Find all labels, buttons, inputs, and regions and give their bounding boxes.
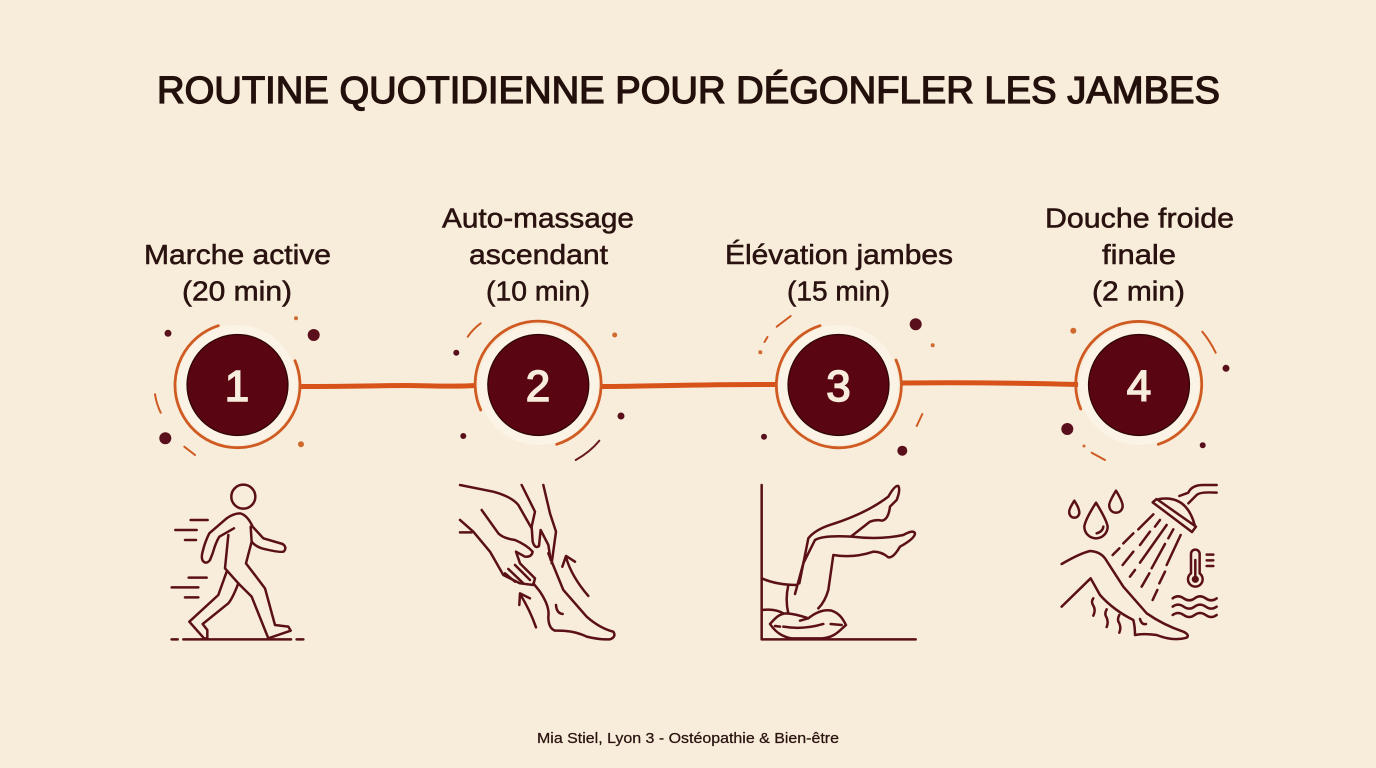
step 3 label [725, 239, 953, 306]
step 4 label [1045, 202, 1234, 306]
step 4 label: (2 min) [1092, 276, 1185, 306]
step 3 label: Élévation jambes [725, 239, 953, 270]
step 1 label: (20 min) [182, 276, 292, 306]
step 3 badge [776, 325, 901, 448]
step 2 label: ascendant [469, 239, 608, 270]
step 4 badge [1076, 321, 1202, 445]
step 3 label: (15 min) [787, 276, 890, 306]
step 4 label: Douche froide [1045, 202, 1234, 234]
step 2 label: Auto-massage [442, 202, 634, 234]
icon: walking person [172, 485, 303, 639]
step 1 label [144, 239, 331, 306]
step 2 label: (10 min) [486, 276, 590, 306]
decorative dots and ticks around badges [155, 316, 1230, 460]
title: ROUTINE QUOTIDIENNE POUR DÉGONFLER LES JAMBES [157, 69, 1220, 112]
step 2 badge [475, 321, 601, 445]
step 2 badge: 2 [526, 362, 550, 411]
step 2 label [442, 202, 634, 306]
step 3 badge: 3 [826, 362, 851, 411]
icon: cold shower on leg [1062, 485, 1217, 639]
timeline connector lines [300, 383, 1078, 386]
step 4 badge: 4 [1127, 362, 1151, 411]
icon: ascending leg massage [460, 485, 614, 639]
footer credit: Mia Stiel, Lyon 3 - Ostéopathie & Bien-être [537, 730, 839, 747]
step 4 label: finale [1102, 239, 1176, 270]
icon: raised legs on pillow [762, 485, 916, 639]
step 1 badge [175, 325, 300, 448]
step 1 label: Marche active [144, 239, 331, 270]
step 1 badge: 1 [225, 362, 249, 411]
